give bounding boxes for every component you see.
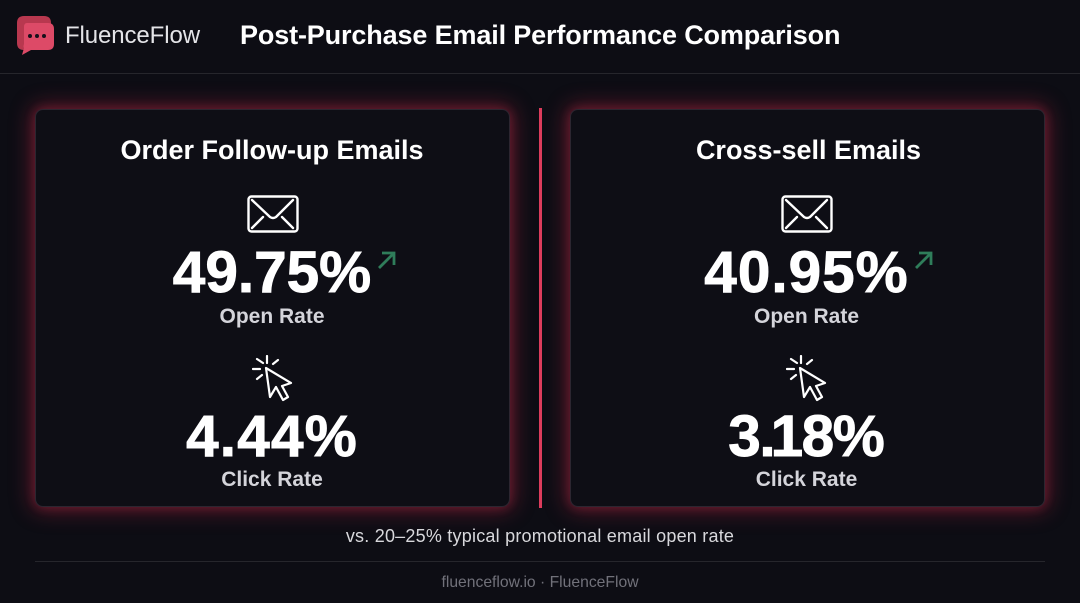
- icon: click cursor: [252, 355, 292, 402]
- panel: order follow-up emails: [35, 109, 510, 507]
- footer text: fluenceflow.io · FluenceFlow: [441, 574, 639, 591]
- center divider: [539, 108, 542, 508]
- panel: cross-sell emails: [570, 109, 1045, 507]
- click rate label: Click Rate: [756, 468, 857, 491]
- click rate value: 3.18%: [728, 404, 885, 469]
- open rate label: Open Rate: [219, 305, 325, 328]
- icon: envelope: [247, 195, 299, 233]
- open rate value: 40.95%: [704, 240, 909, 305]
- icon: up arrow: [378, 252, 396, 269]
- icon: up arrow: [915, 252, 932, 269]
- comparison note: vs. 20–25% typical promotional email open rate: [346, 526, 734, 546]
- panel heading: Order Follow-up Emails: [120, 135, 424, 165]
- click rate label: Click Rate: [221, 468, 323, 491]
- open rate label: Open Rate: [754, 305, 859, 328]
- footer divider: [35, 561, 1045, 562]
- icon: click cursor: [786, 355, 826, 402]
- logo icon: [17, 16, 54, 55]
- icon: envelope: [781, 195, 833, 233]
- title: Post-Purchase Email Performance Comparison: [240, 20, 840, 50]
- open rate value: 49.75%: [173, 240, 371, 305]
- click rate value: 4.44%: [186, 404, 358, 469]
- panel heading: Cross-sell Emails: [696, 135, 921, 165]
- header divider: [0, 73, 1080, 74]
- brand name: FluenceFlow: [65, 22, 200, 49]
